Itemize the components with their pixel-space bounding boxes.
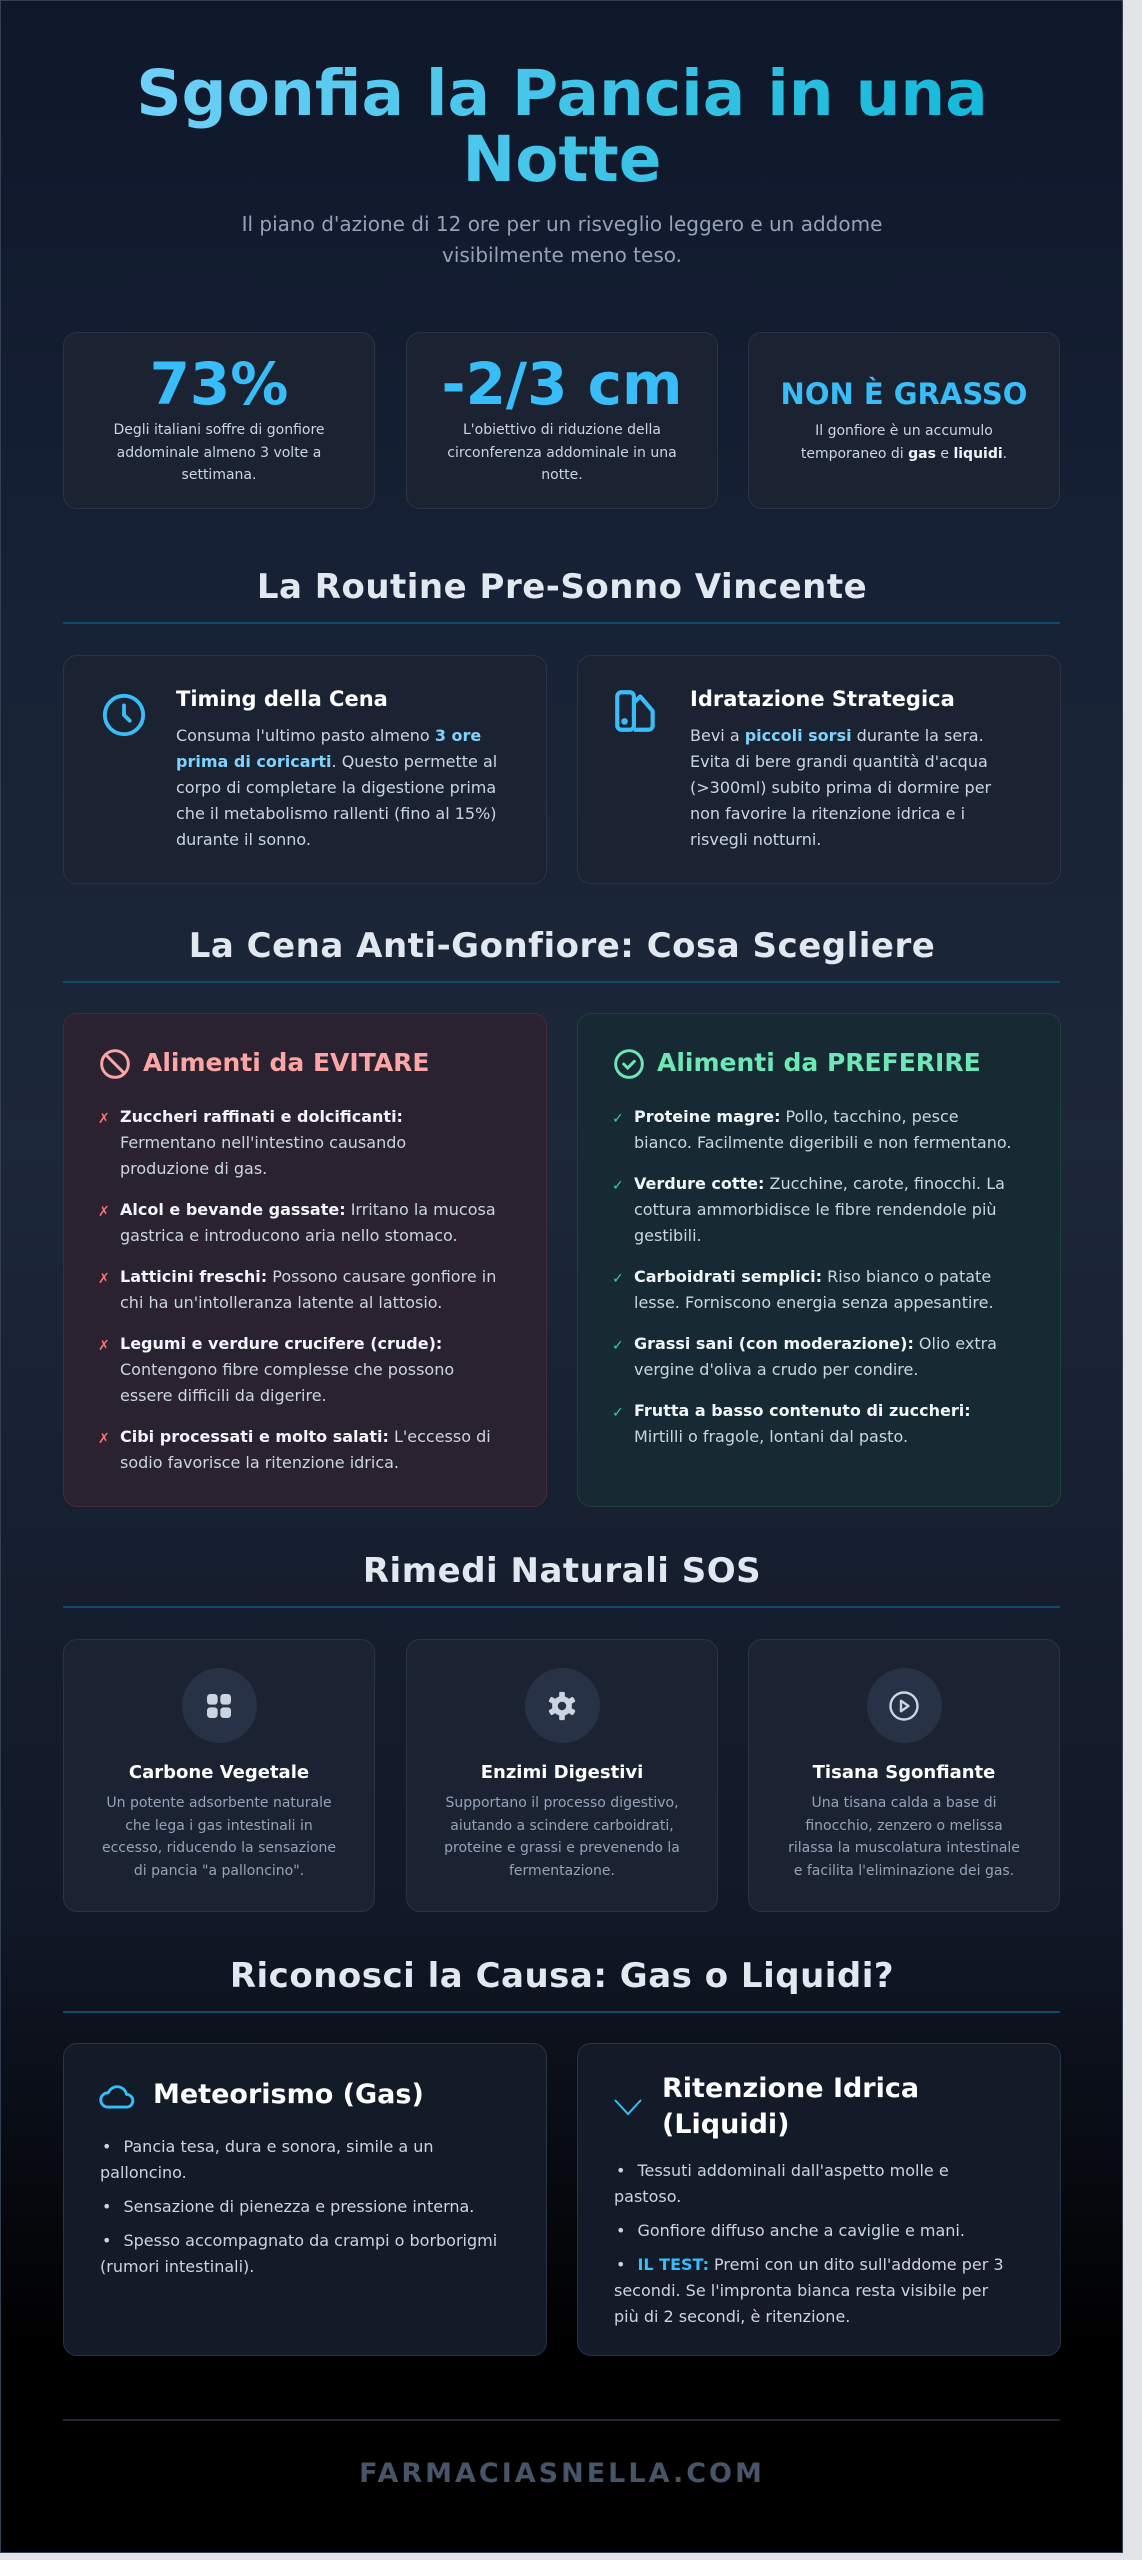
panel: alimenti da preferire: ✓ (612, 1271, 624, 1287)
heading: routine: La Routine Pre-Sonno Vincente (257, 567, 867, 607)
stat card: non è grasso: NON È GRASSO (781, 377, 1027, 411)
panel: tisana sgonfiante: Una tisana calda a base di finocchio, zenzero o melissa rilassa la muscolatura intestinale e facilita l'eliminazione dei gas. (788, 1795, 1020, 1878)
panel: meteorismo (63, 2043, 547, 2356)
panel: alimenti da preferire: ✓ (612, 1405, 624, 1421)
panel: alimenti da evitare: Alimenti da EVITARE (143, 1048, 430, 1077)
panel: alimenti da preferire: Alimenti da PREFERIRE (657, 1048, 981, 1077)
subtitle: Il piano d'azione di 12 ore per un risveglio leggero e un addome visibilmente meno teso. (242, 212, 882, 267)
panel: timing della cena: Timing della Cena (176, 687, 388, 711)
icon: water (615, 690, 655, 732)
stat card: 73%: 73% (150, 350, 288, 418)
panel: alimenti da preferire: ✓ (612, 1111, 624, 1127)
panel: ritenzione idrica: IL TEST: Premi con un dito sull'addome per 3 secondi. Se l'impronta bianca resta visibile per più di 2 secondi, è ritenzione. (614, 2255, 1004, 2326)
panel: tisana sgonfiante: Tisana Sgonfiante (813, 1762, 995, 1783)
icon: grid (182, 1668, 256, 1743)
panel: enzimi digestivi: Enzimi Digestivi (481, 1762, 643, 1783)
title: Notte (463, 123, 661, 196)
stat card: -2/3 cm: L'obiettivo di riduzione della circonferenza addominale in una notte. (447, 422, 677, 483)
title (1, 61, 1123, 193)
panel: ritenzione idrica (577, 2043, 1061, 2356)
heading: cena: La Cena Anti-Gonfiore: Cosa Scegliere (189, 926, 935, 966)
panel: alimenti da evitare: Cibi processati e molto salati: L'eccesso di sodio favorisce la ritenzione idrica. (120, 1427, 491, 1472)
panel: alimenti da preferire: Verdure cotte: Zucchine, carote, finocchi. La cottura ammorbidisce le fibre rendendole più gestibili. (634, 1174, 1005, 1245)
heading: causa: Riconosci la Causa: Gas o Liquidi? (230, 1956, 894, 1996)
panel: alimenti da evitare: Legumi e verdure crucifere (crude): Contengono fibre complesse che possono essere difficili da digerire. (120, 1334, 454, 1405)
panel: alimenti da evitare: ✗ (98, 1338, 110, 1354)
panel: alimenti da preferire: ✓ (612, 1178, 624, 1194)
stat card: non è grasso (748, 332, 1060, 509)
panel: alimenti da preferire: Frutta a basso contenuto di zuccheri: Mirtilli o fragole, lontani dal pasto. (634, 1401, 971, 1446)
panel: carbone vegetale: Carbone Vegetale (129, 1762, 309, 1783)
icon: cloud (99, 2085, 134, 2108)
panel: idratazione: Bevi a piccoli sorsi durante la sera. Evita di bere grandi quantità d'acqua (>300ml) subito prima di dormire per non favorire la ritenzione idrica e i risvegli notturni. (690, 726, 991, 849)
icon: chevron (614, 2099, 642, 2116)
icon: play circle (866, 1668, 942, 1743)
panel: alimenti da preferire (577, 1013, 1061, 1507)
panel: alimenti da evitare: Alcol e bevande gassate: Irritano la mucosa gastrica e introducono aria nello stomaco. (120, 1200, 496, 1245)
panel: meteorismo: Sensazione di pienezza e pressione interna. (123, 2197, 474, 2216)
panel: alimenti da evitare: ✗ (98, 1204, 110, 1220)
stat card: 73%: Degli italiani soffre di gonfiore addominale almeno 3 volte a settimana. (113, 422, 325, 483)
title: Sgonfia la Pancia in una (136, 57, 988, 130)
panel: meteorismo: Pancia tesa, dura e sonora, simile a un palloncino. (100, 2137, 434, 2182)
panel: ritenzione idrica: Gonfiore diffuso anche a caviglie e mani. (637, 2221, 965, 2240)
panel: timing della cena (63, 655, 547, 884)
icon: gear (524, 1668, 600, 1743)
panel: enzimi digestivi (406, 1639, 718, 1912)
panel: meteorismo: Meteorismo (Gas) (153, 2079, 424, 2110)
stat card: non è grasso: Il gonfiore è un accumulo temporaneo di gas e liquidi. (801, 423, 1007, 462)
heading: rimedi: Rimedi Naturali SOS (363, 1551, 761, 1591)
panel: tisana sgonfiante (748, 1639, 1060, 1912)
panel: alimenti da preferire: Grassi sani (con moderazione): Olio extra vergine d'oliva a crudo per condire. (634, 1334, 997, 1379)
panel: ritenzione idrica: Tessuti addominali dall'aspetto molle e pastoso. (614, 2161, 949, 2206)
panel: alimenti da evitare: Zuccheri raffinati e dolcificanti: Fermentano nell'intestino causando produzione di gas. (120, 1107, 406, 1178)
panel: alimenti da preferire: ✓ (612, 1338, 624, 1354)
panel: alimenti da evitare: ✗ (98, 1431, 110, 1447)
panel: carbone vegetale: Un potente adsorbente naturale che lega i gas intestinali in eccesso, riducendo la sensazione di pancia "a palloncino". (102, 1795, 336, 1878)
icon: ban (100, 1049, 130, 1079)
panel: timing della cena: Consuma l'ultimo pasto almeno 3 ore prima di coricarti. Questo permette al corpo di completare la digestione prima che il metabolismo rallenti (fino al 15%) durante il sonno. (176, 726, 497, 849)
stat card: 73% (63, 332, 375, 509)
panel: meteorismo: Spesso accompagnato da crampi o borborigmi (rumori intestinali). (100, 2231, 497, 2276)
stat card: -2/3 cm: -2/3 cm (442, 350, 682, 418)
panel: alimenti da evitare: ✗ (98, 1271, 110, 1287)
panel: alimenti da preferire: Carboidrati semplici: Riso bianco o patate lesse. Forniscono energia senza appesantire. (634, 1267, 994, 1312)
footer brand: FARMACIASNELLA.COM (359, 2458, 765, 2489)
panel: alimenti da evitare: Latticini freschi: Possono causare gonfiore in chi ha un'intolleranza latente al lattosio. (120, 1267, 496, 1312)
panel: enzimi digestivi: Supportano il processo digestivo, aiutando a scindere carboidrati, proteine e grassi e prevenendo la fermentazione. (444, 1795, 680, 1878)
icon: check circle (614, 1049, 644, 1079)
icon: clock (102, 694, 146, 736)
stat card: -2/3 cm (406, 332, 718, 509)
panel: carbone vegetale (63, 1639, 375, 1912)
panel: ritenzione idrica: Ritenzione Idrica (662, 2073, 919, 2104)
panel: alimenti da preferire: Proteine magre: Pollo, tacchino, pesce bianco. Facilmente digeribili e non fermentano. (634, 1107, 1011, 1152)
panel: idratazione: Idratazione Strategica (690, 687, 955, 711)
panel: idratazione (577, 655, 1061, 884)
panel: alimenti da evitare: ✗ (98, 1111, 110, 1127)
panel: alimenti da evitare (63, 1013, 547, 1507)
panel: ritenzione idrica: (Liquidi) (662, 2109, 790, 2140)
